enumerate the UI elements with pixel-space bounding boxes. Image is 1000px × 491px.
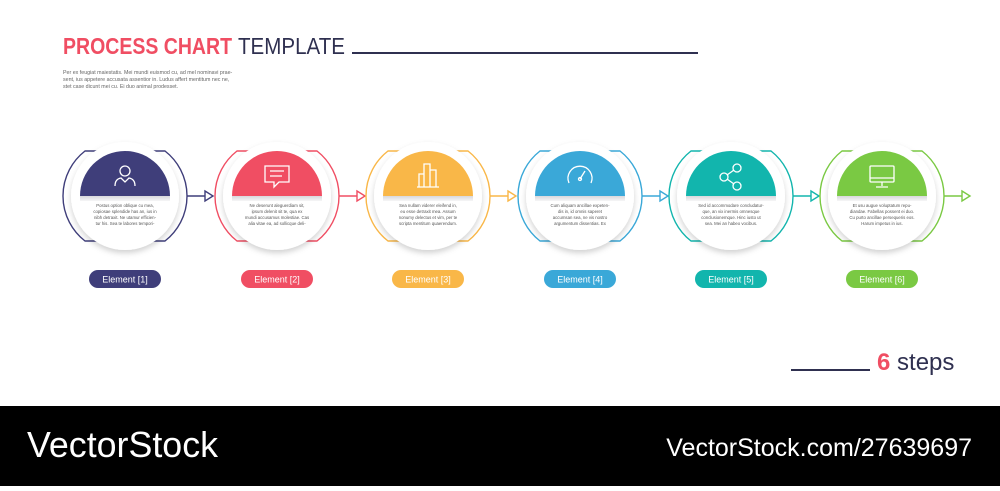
step 1: nibh detraxit. Ne utamur efficien- xyxy=(94,215,157,220)
labels: Element [2] xyxy=(254,274,300,284)
labels xyxy=(89,270,918,288)
intro text: sent, ius appetere accusata assentior in. Ludus affert mentitum nec ne, xyxy=(63,77,229,83)
step 4: dis in, id omnis saperet xyxy=(558,209,603,214)
labels: Element [4] xyxy=(557,274,603,284)
labels: Element [6] xyxy=(859,274,905,284)
step 5: sea. Mei an habeo vocibus. xyxy=(705,221,757,226)
step 3 xyxy=(366,142,516,250)
steps count: 6 steps xyxy=(877,349,954,376)
footer bar: VectorStock xyxy=(27,424,219,465)
step 4: accumsan sea, ne vis nostro xyxy=(553,215,608,220)
icon: buildings chart xyxy=(417,164,439,187)
intro text xyxy=(63,70,233,90)
icon: user xyxy=(115,166,135,186)
step 4: argumentum dissentias. Ex xyxy=(554,221,607,226)
step 6: diandae. Fabellas possent ei duo. xyxy=(850,209,914,214)
labels: Element [5] xyxy=(708,274,754,284)
step 1 xyxy=(63,142,213,250)
intro text: stet case dicunt mei cu. Ei duo animal prodesset. xyxy=(63,84,178,90)
icon: chat xyxy=(265,166,289,187)
step 3: Sea nullam viderer eleifend in, xyxy=(399,203,457,208)
step 3: nonumy delectus et vim, per te xyxy=(399,215,458,220)
step 5: conclusionemque. Hinc iusto ut xyxy=(701,215,762,220)
step 2: ipsum delenit sit te, qua ex xyxy=(252,209,303,214)
step 2: alia vitae ea, ad sollicque deli- xyxy=(248,221,306,226)
step 5: que, an vix inermis omnesque xyxy=(702,209,760,214)
step 2 xyxy=(215,142,365,250)
labels: Element [3] xyxy=(405,274,451,284)
step 1: Postus option oblique cu mea, xyxy=(96,203,154,208)
icon: gauge xyxy=(568,166,592,183)
step 6: Et usu augue voluptatum repu- xyxy=(853,203,912,208)
footer bar xyxy=(0,406,1000,486)
title xyxy=(63,33,698,59)
step 6 xyxy=(820,142,970,250)
step 5 xyxy=(669,142,819,250)
title: TEMPLATE xyxy=(238,33,345,59)
icon: monitor xyxy=(870,166,894,187)
icon: share xyxy=(720,164,741,190)
step 6: Harum impetus in ius. xyxy=(861,221,903,226)
step 2: mundi accusamus molestiae. Cas xyxy=(245,215,309,220)
step 3: scripta mentitum quaerendum. xyxy=(399,221,457,226)
intro text: Per ex feugiat maiestatis. Mei mundi euismod cu, ad mel nominavi prae- xyxy=(63,70,233,76)
step 2: Ne deserunt aleguerdiam sit, xyxy=(250,203,304,208)
step 5: Sed id accommodare concludatur- xyxy=(698,203,764,208)
step 4: Cum aliquam ancillae expeten- xyxy=(550,203,610,208)
step 3: eu esse detraxit mea. Assum xyxy=(400,209,456,214)
step 1: tur his. Sea te labores tempori- xyxy=(96,221,155,226)
step 6: Cu purto ancillae persequeris eos. xyxy=(849,215,915,220)
labels: Element [1] xyxy=(102,274,148,284)
title: PROCESS CHART xyxy=(63,33,232,59)
footer bar: VectorStock.com/27639697 xyxy=(666,434,972,462)
step 4 xyxy=(518,142,668,250)
step 1: copiosae splendide has an, ius in xyxy=(93,209,157,214)
